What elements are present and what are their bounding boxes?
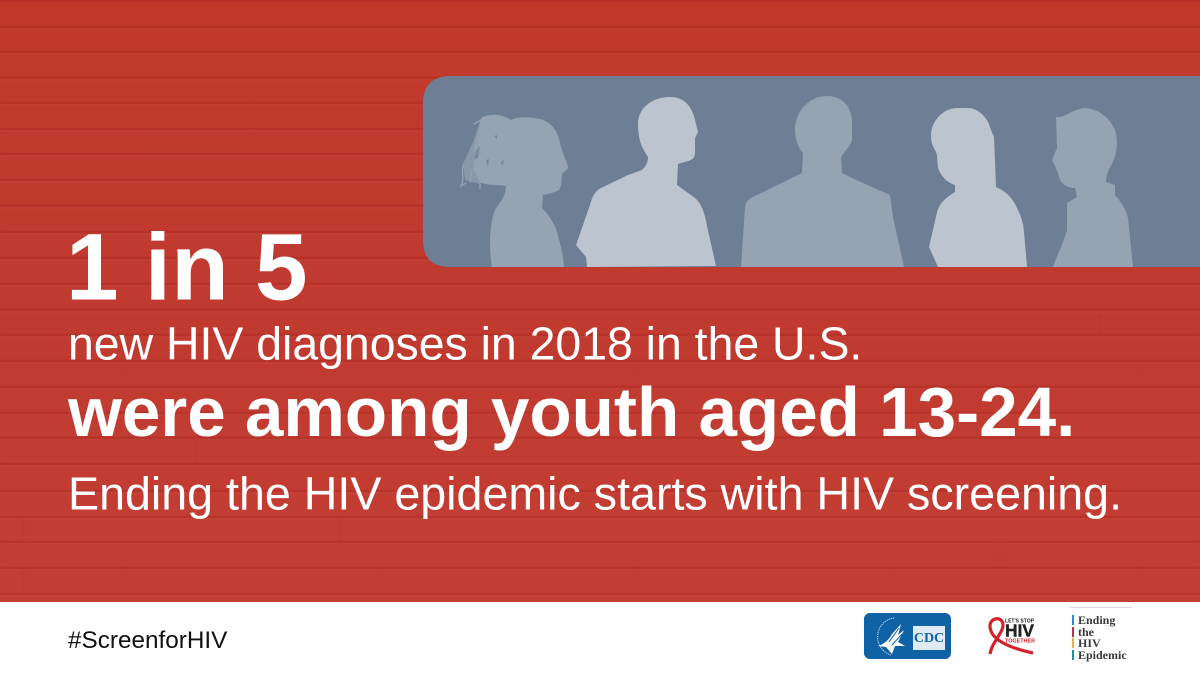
logo: Let's Stop HIV Together: LET'S STOP — [1005, 618, 1034, 624]
logo: Ending the HIV Epidemic: the — [1078, 625, 1095, 639]
hashtag: #ScreenforHIV — [68, 627, 228, 654]
logo: Let's Stop HIV Together — [990, 618, 1035, 654]
text: new HIV diagnoses: new HIV diagnoses in 2018 in the U.S. — [68, 318, 862, 370]
footer bar — [0, 602, 1200, 675]
logo: Ending the HIV Epidemic — [1069, 607, 1132, 662]
silhouette: person with ponytail — [461, 115, 568, 267]
logo: Ending the HIV Epidemic: Epidemic — [1078, 648, 1127, 662]
logo: Ending the HIV Epidemic: Ending — [1078, 613, 1115, 627]
text: Ending the HIV epidemic: Ending the HIV epidemic starts with HIV screening. — [68, 468, 1122, 520]
logo: Let's Stop HIV Together: HIV — [1005, 620, 1034, 640]
logo: HHS and CDC: CDC — [914, 631, 944, 646]
logo: Let's Stop HIV Together: TOGETHER — [1005, 638, 1035, 644]
text: were among youth: were among youth aged 13-24. — [67, 373, 1075, 451]
panel background — [423, 76, 1200, 267]
silhouette: person in jacket — [741, 96, 904, 267]
silhouette: tall person — [576, 97, 716, 267]
silhouette: short-haired person — [1052, 108, 1133, 267]
silhouette: person with long hair — [929, 108, 1027, 267]
headline: 1 in 5: 1 in 5 — [66, 214, 308, 320]
logo: HHS and CDC — [864, 613, 951, 659]
logo: Ending the HIV Epidemic: HIV — [1078, 636, 1101, 650]
panel: silhouettes of five young people — [423, 76, 1200, 267]
